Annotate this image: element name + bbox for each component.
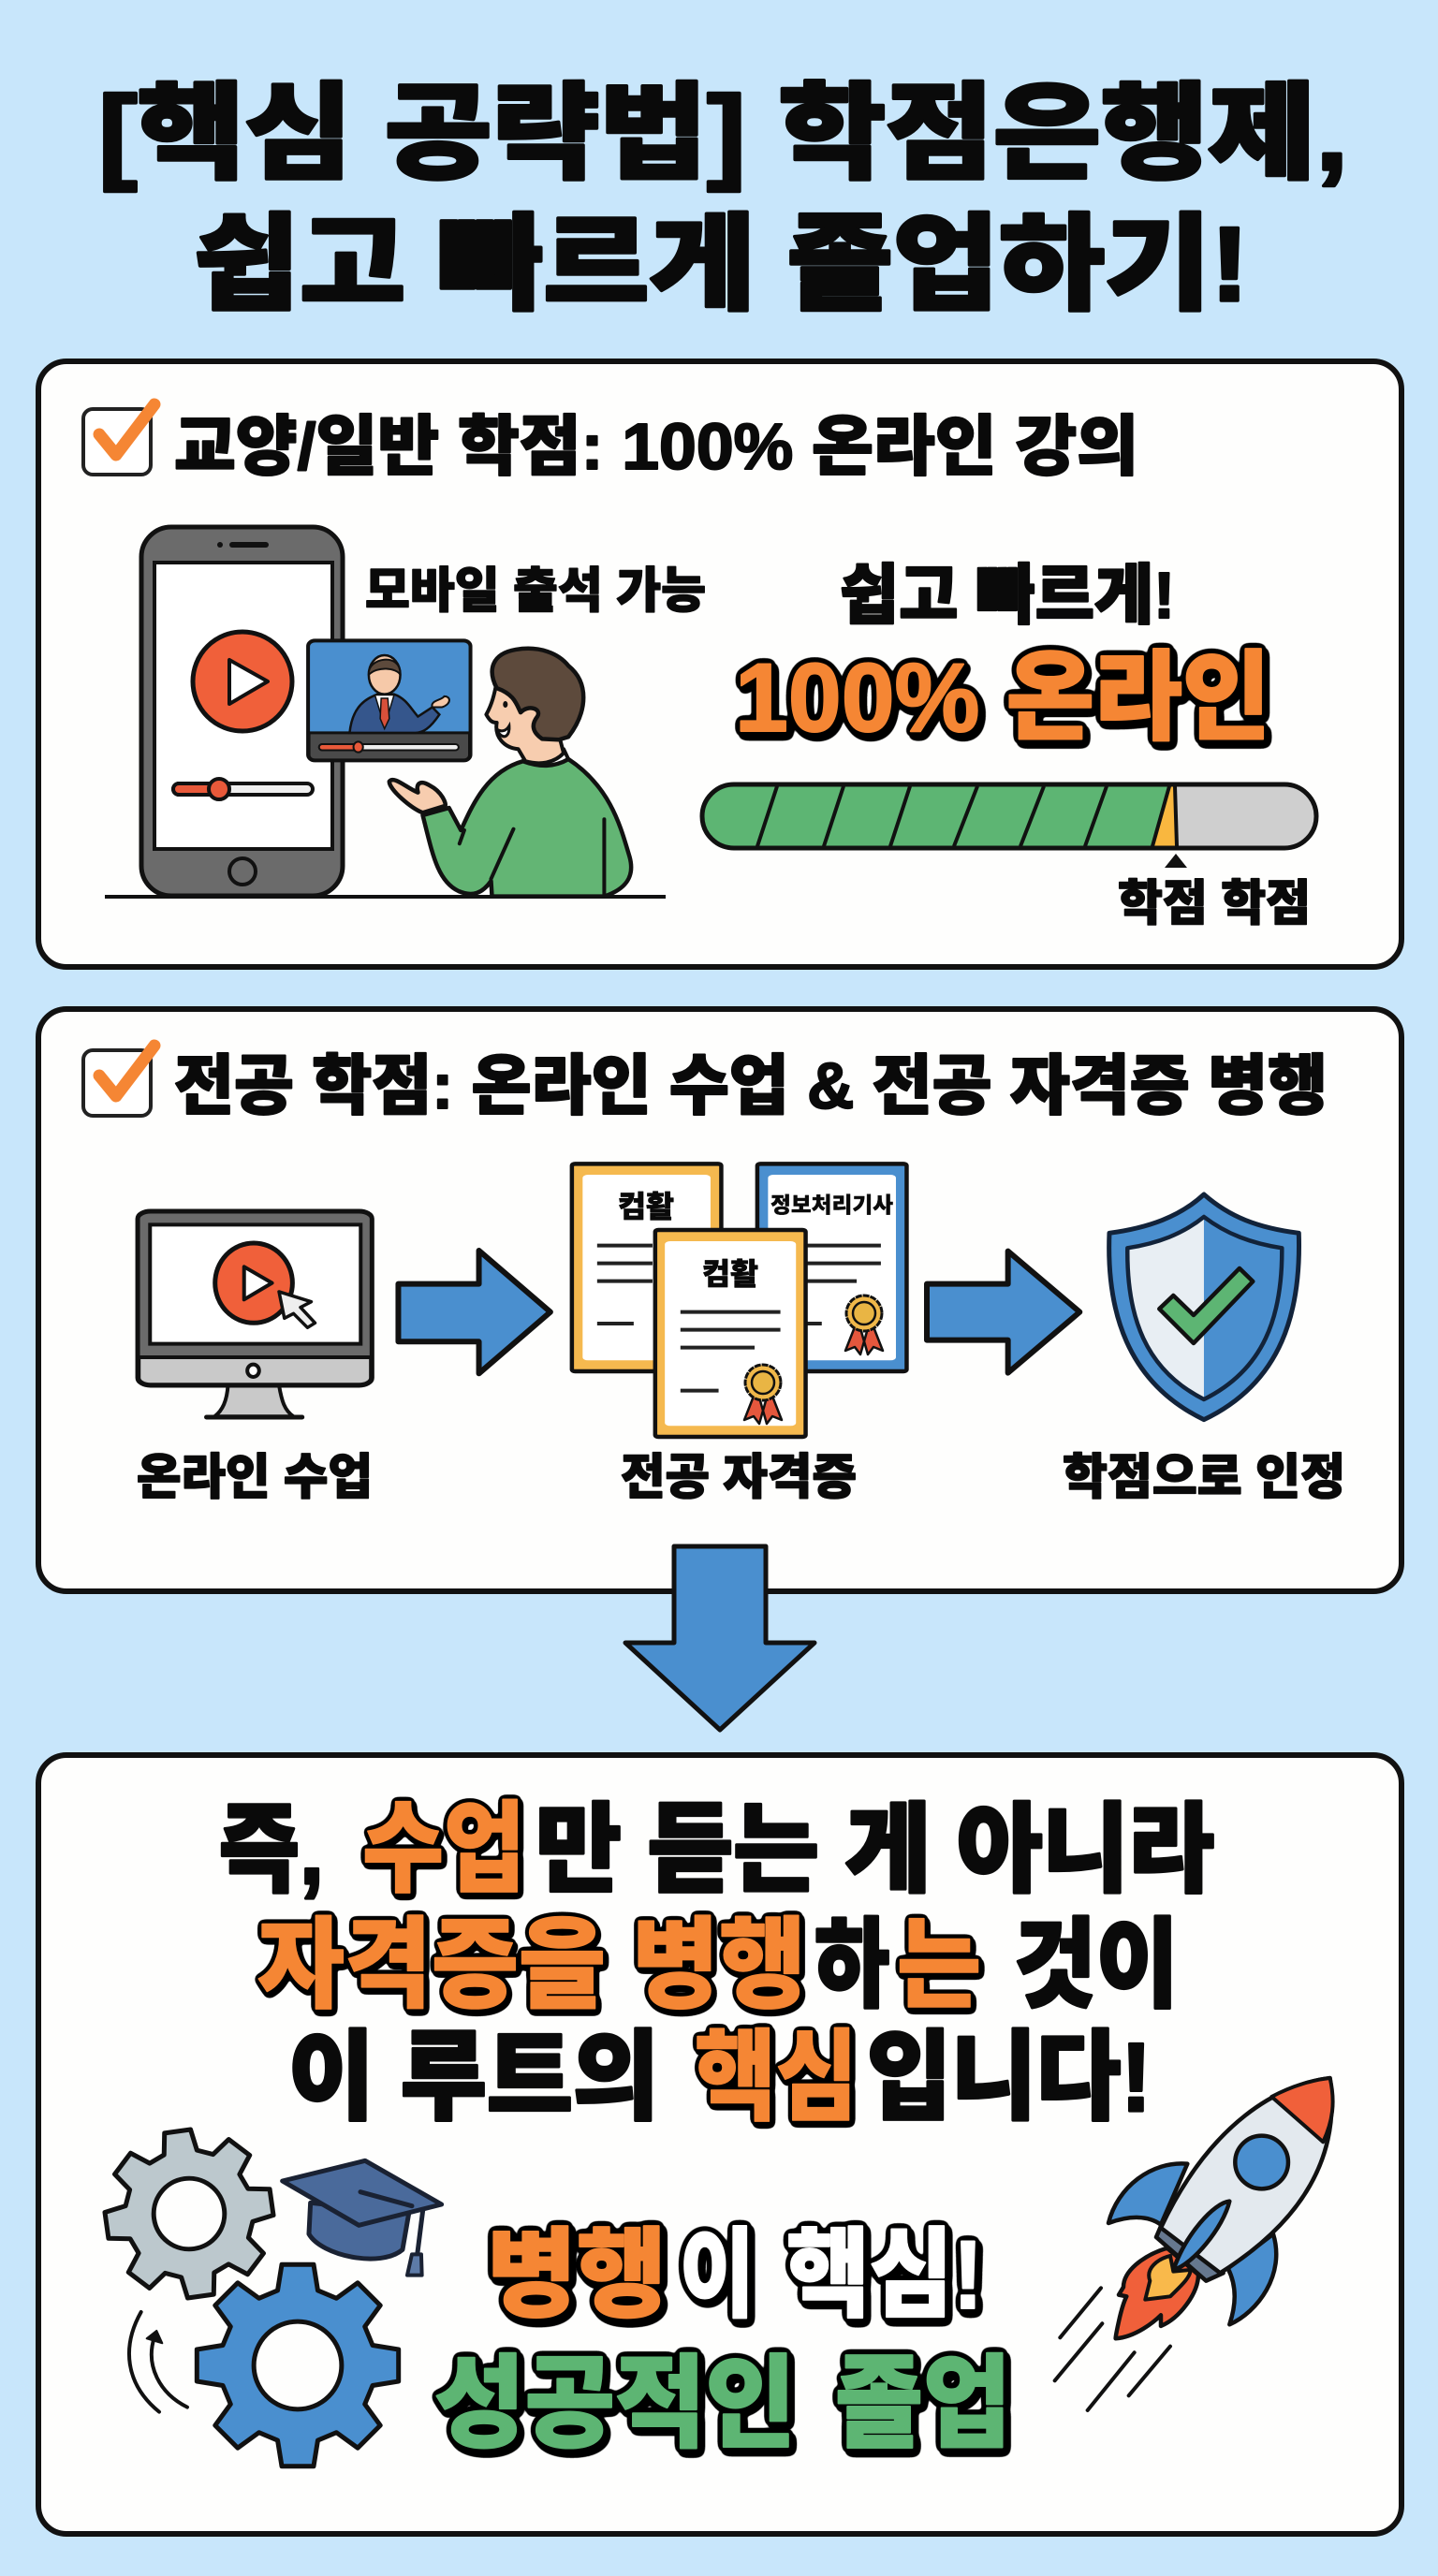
callout: concurrency is key: 이 — [680, 2221, 755, 2330]
callout: successful graduation: 성공적인 — [434, 2347, 796, 2460]
progress bar — [702, 784, 1316, 848]
text: key message: 즉, — [219, 1796, 324, 1905]
front certificate — [655, 1230, 806, 1437]
label: major certificate: 전공 자격증 — [621, 1451, 857, 1505]
icon: pointer triangle — [1165, 854, 1187, 868]
label: recognized as credits: 학점으로 인정 — [1063, 1451, 1345, 1505]
icon: front medal — [744, 1365, 782, 1424]
arrow: to certificates — [398, 1251, 550, 1373]
label: online class: 온라인 수업 — [137, 1451, 373, 1505]
icon: certificate stack — [572, 1164, 906, 1437]
icon: orange checkbox — [83, 404, 154, 475]
text: key message: 입니다! — [867, 2024, 1152, 2132]
panel: conclusion — [38, 1755, 1401, 2534]
icon: blue gear — [197, 2264, 399, 2466]
ground line — [105, 895, 666, 899]
icon: graduation cap — [283, 2160, 442, 2276]
illustration: phone and learner — [105, 527, 666, 897]
icon: video lecture card — [308, 640, 471, 760]
back orange certificate — [572, 1164, 721, 1371]
icon: shield with check — [1109, 1194, 1299, 1420]
title — [98, 75, 1348, 323]
callout: successful graduation — [434, 2347, 1011, 2460]
text: information processing engineer: 정보처리기사 — [770, 1193, 893, 1217]
heading: general credits: 교양/일반 학점: 100% 온라인 강의 — [174, 410, 1138, 483]
callout: concurrency is key: 병행 — [487, 2221, 667, 2330]
icon: rocket — [1055, 2078, 1333, 2410]
text: key message: 것이 — [1014, 1911, 1179, 2020]
callout: concurrency is key — [487, 2221, 983, 2330]
text: key message: 수업 — [362, 1794, 525, 1905]
text: key message: 는 — [897, 1910, 981, 2021]
arrow: down — [625, 1546, 814, 1730]
callout: successful graduation: 졸업 — [835, 2347, 1011, 2460]
icon: desktop monitor — [138, 1211, 372, 1417]
callout: concurrency is key: 핵심! — [786, 2221, 983, 2330]
callout: 100% online: 100% 온라인 — [735, 644, 1270, 753]
text: front certificate name: 컴활 — [702, 1257, 758, 1291]
arrow: to shield — [927, 1251, 1079, 1373]
text: key message: 핵심 — [695, 2023, 858, 2133]
title: [핵심 공략법] 학점은행제, — [98, 75, 1348, 192]
back blue certificate — [757, 1164, 906, 1371]
text: key message: 하 — [814, 1911, 889, 2020]
label: mobile attendance: 모바일 출석 가능 — [365, 564, 706, 619]
title: 쉽고 빠르게 졸업하기! — [194, 206, 1249, 323]
text: key message: 자격증을 병행 — [257, 1910, 806, 2021]
panel: general credits online — [38, 361, 1401, 967]
icon: orange checkbox — [83, 1046, 154, 1116]
text: back certificate name: 컴활 — [618, 1190, 674, 1223]
icon: rotation arrows — [129, 2312, 187, 2412]
text: key message — [219, 1794, 1214, 2133]
icon: smiling learner — [389, 649, 631, 897]
icon: smartphone — [141, 527, 343, 896]
icon: back medal — [845, 1295, 883, 1354]
icon: gray gear — [95, 2120, 283, 2307]
label: credit credit: 학점 학점 — [1118, 877, 1311, 931]
text: key message: 이 루트의 — [288, 2024, 659, 2132]
heading: major credits: 전공 학점: 온라인 수업 & 전공 자격증 병행 — [174, 1049, 1328, 1122]
text: key message: 만 듣는 게 아니라 — [536, 1796, 1214, 1905]
panel: major credits — [38, 1009, 1401, 1591]
text: easy and fast: 쉽고 빠르게! — [840, 559, 1175, 632]
